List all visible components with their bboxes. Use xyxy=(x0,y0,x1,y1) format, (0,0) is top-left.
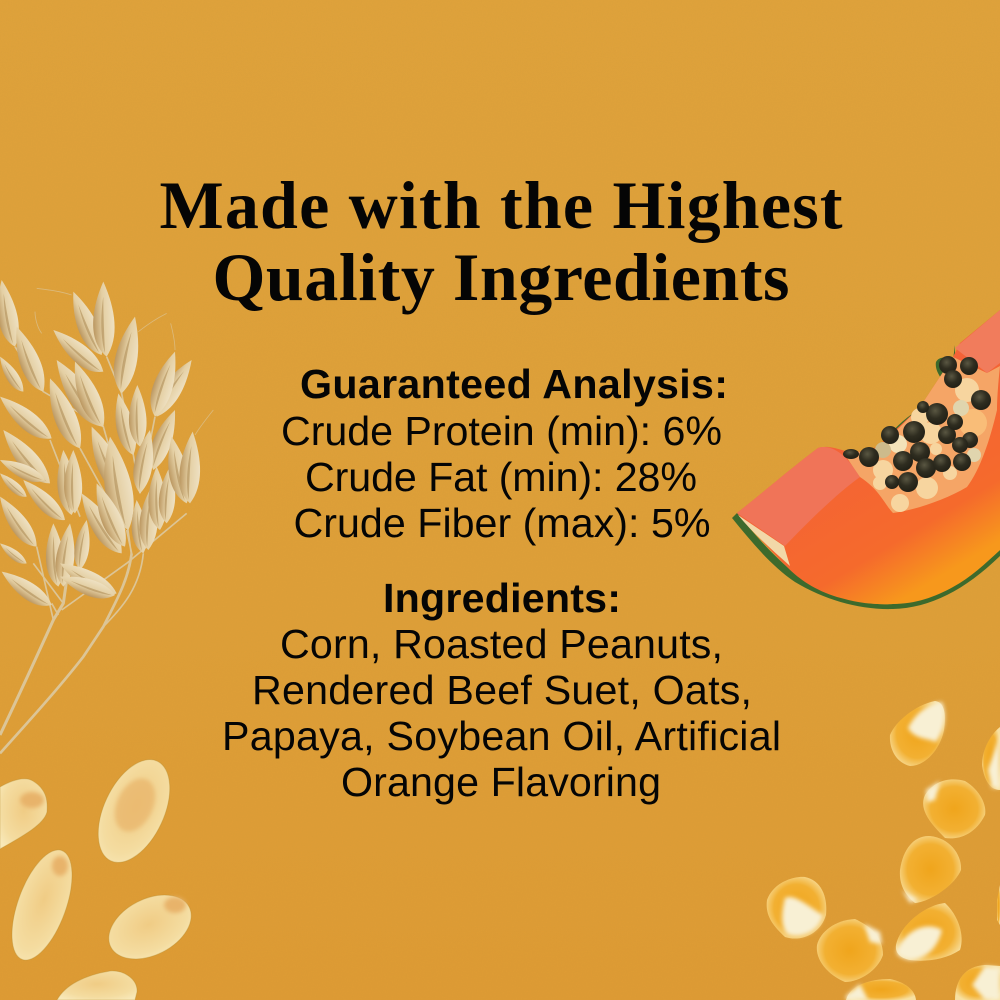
illustration: oat sprig xyxy=(0,278,213,753)
ingredients text block: Corn, Roasted Peanuts, xyxy=(280,621,723,667)
ingredients text block xyxy=(222,575,781,805)
guaranteed analysis text block xyxy=(281,361,728,546)
title: Made with the Highest xyxy=(160,167,843,243)
corn white germs xyxy=(782,702,1000,1000)
illustration: peanuts xyxy=(0,748,202,1000)
ingredients text block: Rendered Beef Suet, Oats, xyxy=(252,667,752,713)
papaya right cut face xyxy=(955,310,1000,373)
guaranteed analysis text block: Guaranteed Analysis: xyxy=(300,361,728,407)
ingredients text block: Papaya, Soybean Oil, Artificial xyxy=(222,713,781,759)
guaranteed analysis text block: Crude Fiber (max): 5% xyxy=(294,500,710,546)
papaya flesh xyxy=(737,310,1000,604)
ingredients text block: Ingredients: xyxy=(383,575,621,621)
guaranteed analysis text block: Crude Fat (min): 28% xyxy=(305,454,697,500)
illustration: papaya slice xyxy=(732,310,1000,609)
papaya green rind xyxy=(732,345,1000,609)
papaya pale edge xyxy=(738,515,790,566)
papaya pulp pieces xyxy=(873,378,987,512)
ingredients text block: Orange Flavoring xyxy=(341,759,661,805)
papaya cut face xyxy=(737,447,860,546)
peanut details xyxy=(20,772,186,913)
papaya seed cavity xyxy=(845,357,1000,513)
title xyxy=(160,167,843,315)
papaya seeds xyxy=(843,356,991,492)
illustration: corn kernels xyxy=(767,701,1000,1000)
title: Quality Ingredients xyxy=(212,239,790,315)
guaranteed analysis text block: Crude Protein (min): 6% xyxy=(281,408,722,454)
